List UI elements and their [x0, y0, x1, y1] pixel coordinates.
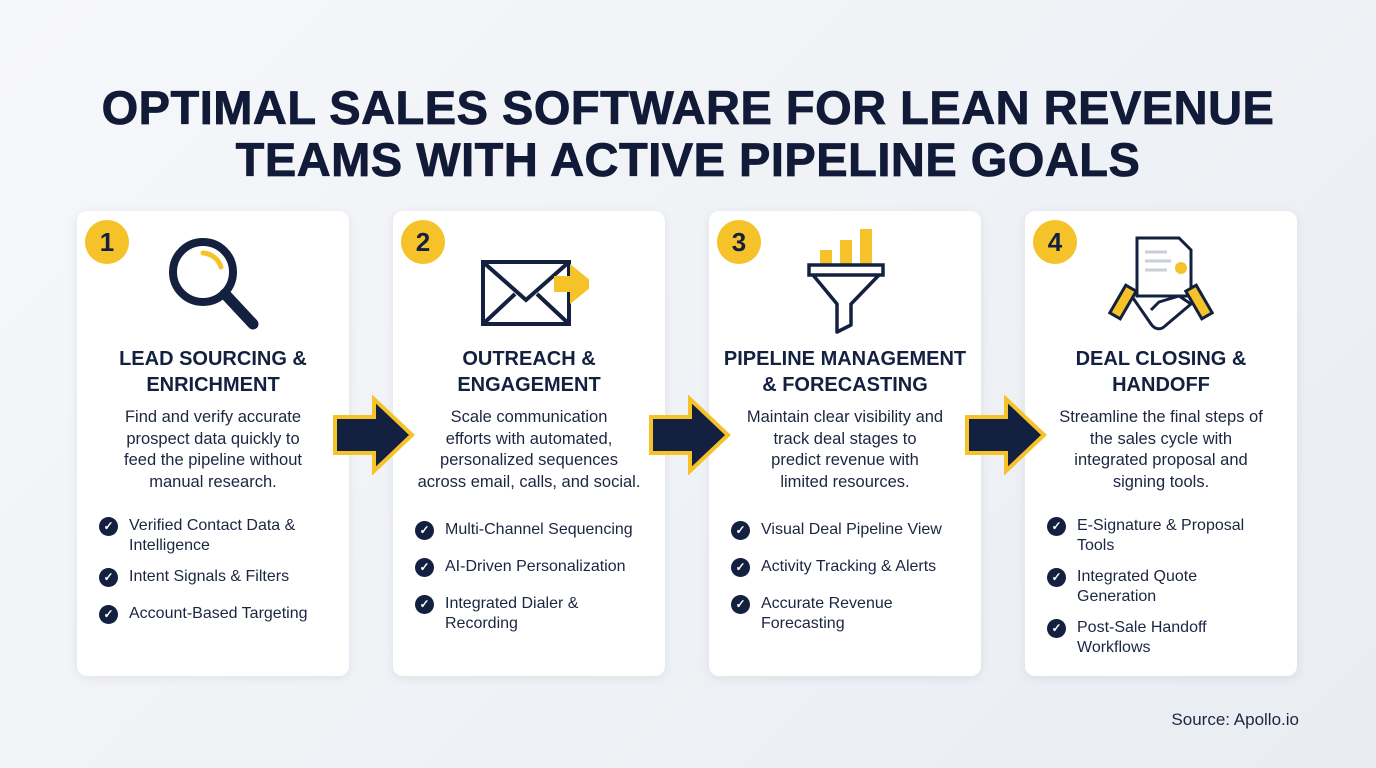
feature list: Multi-Channel Sequencing — [445, 521, 633, 538]
heading: ENRICHMENT — [146, 374, 280, 396]
heading: OUTREACH & — [462, 348, 596, 370]
heading: ENGAGEMENT — [457, 374, 601, 396]
description: personalized sequences — [440, 451, 618, 469]
panel: deal closing — [1025, 211, 1297, 676]
feature list: Verified Contact Data & — [129, 517, 295, 534]
description: signing tools. — [1113, 472, 1209, 490]
title — [102, 81, 1274, 186]
number badge 4 — [1033, 220, 1077, 264]
heading: PIPELINE MANAGEMENT — [724, 348, 966, 370]
icon: magnifier — [169, 238, 258, 330]
panel: lead sourcing — [77, 211, 349, 676]
description: integrated proposal and — [1074, 451, 1248, 469]
feature list: Generation — [1077, 588, 1156, 605]
number badge 3: 3 — [732, 227, 746, 257]
heading — [1076, 348, 1246, 396]
description: Find and verify accurate — [125, 408, 301, 426]
description: predict revenue with — [771, 451, 919, 469]
feature list — [99, 517, 307, 624]
feature list: Intent Signals & Filters — [129, 568, 289, 585]
icon: funnel with bars — [807, 229, 885, 334]
description: Streamline the final steps of — [1059, 408, 1263, 426]
number badge 1 — [85, 220, 129, 264]
description: Scale communication — [451, 408, 607, 426]
description: Maintain clear visibility and — [747, 408, 943, 426]
panel: pipeline — [709, 211, 981, 676]
source note: Source: Apollo.io — [1171, 710, 1299, 729]
feature list — [415, 521, 633, 632]
feature list: Recording — [445, 615, 518, 632]
description: track deal stages to — [773, 430, 917, 448]
feature list: Post-Sale Handoff — [1077, 619, 1207, 636]
number badge 3 — [717, 220, 761, 264]
arrow 3 — [965, 395, 1047, 475]
feature list: Intelligence — [129, 537, 210, 554]
feature list: Account-Based Targeting — [129, 605, 307, 622]
feature list: Workflows — [1077, 639, 1150, 656]
heading: LEAD SOURCING & — [119, 348, 307, 370]
heading: DEAL CLOSING & — [1076, 348, 1246, 370]
feature list: Integrated Dialer & — [445, 595, 578, 612]
number badge 1: 1 — [100, 227, 114, 257]
arrow 2 — [649, 395, 731, 475]
icon: handshake with document — [1108, 236, 1214, 330]
number badge 4: 4 — [1048, 227, 1062, 257]
arrow 1 — [333, 395, 415, 475]
feature list: Accurate Revenue — [761, 595, 893, 612]
description — [1059, 408, 1263, 490]
feature list: E-Signature & Proposal — [1077, 517, 1244, 534]
description: prospect data quickly to — [126, 430, 300, 448]
description: efforts with automated, — [446, 430, 612, 448]
feature list — [731, 521, 942, 632]
feature list — [1047, 517, 1244, 656]
feature list: AI-Driven Personalization — [445, 558, 626, 575]
panel: outreach — [393, 211, 665, 676]
title: TEAMS WITH ACTIVE PIPELINE GOALS — [236, 133, 1140, 186]
feature list: Integrated Quote — [1077, 568, 1197, 585]
number badge 2: 2 — [416, 227, 430, 257]
description — [418, 408, 640, 490]
description — [124, 408, 302, 490]
description: limited resources. — [780, 472, 910, 490]
feature list: Activity Tracking & Alerts — [761, 558, 936, 575]
number badge 2 — [401, 220, 445, 264]
heading: HANDOFF — [1112, 374, 1210, 396]
description — [747, 408, 943, 490]
description: feed the pipeline without — [124, 451, 302, 469]
feature list: Visual Deal Pipeline View — [761, 521, 942, 538]
heading — [119, 348, 307, 396]
heading — [724, 348, 966, 396]
description: across email, calls, and social. — [418, 472, 640, 490]
title: OPTIMAL SALES SOFTWARE FOR LEAN REVENUE — [102, 81, 1274, 134]
heading — [457, 348, 601, 396]
feature list: Forecasting — [761, 615, 845, 632]
icon: envelope — [481, 260, 589, 326]
heading: & FORECASTING — [762, 374, 928, 396]
description: manual research. — [149, 472, 277, 490]
feature list: Tools — [1077, 537, 1114, 554]
description: the sales cycle with — [1090, 430, 1232, 448]
